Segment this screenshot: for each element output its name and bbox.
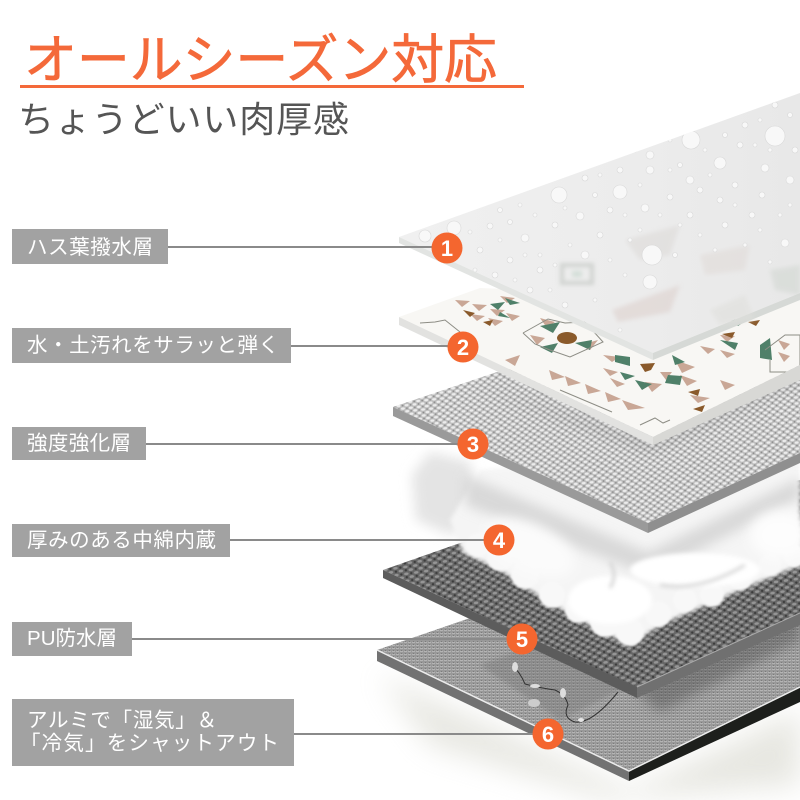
label 2: 水・土汚れをサラッと弾く <box>27 334 279 357</box>
label 3 <box>12 427 461 460</box>
marker 1: 1 <box>441 236 453 261</box>
label 4 <box>12 524 486 557</box>
label 3: 強度強化層 <box>27 432 131 455</box>
aztec motifs <box>420 296 800 425</box>
marker 6: 6 <box>542 722 554 747</box>
label 1 <box>12 229 434 264</box>
marker 2 <box>448 332 478 362</box>
ground shadow <box>380 675 800 800</box>
marker 5: 5 <box>516 627 528 652</box>
layer 4: cotton filling <box>412 440 800 646</box>
subtitle: ちょうどいい肉厚感 <box>18 99 349 140</box>
layer 2: printed pattern sheet <box>399 288 800 445</box>
fluffy lower edge <box>466 533 800 646</box>
marker 2: 2 <box>457 335 469 360</box>
water drops <box>419 102 798 332</box>
water droplets <box>512 662 618 722</box>
label 1: ハス葉撥水層 <box>27 236 153 259</box>
label 4: 厚みのある中綿内蔵 <box>27 529 216 552</box>
layer 3: reinforcement sheet <box>393 300 800 533</box>
layer 1: lotus-leaf water repellent sheet <box>399 93 800 360</box>
label 6: 「冷気」をシャットアウト <box>20 732 279 755</box>
marker 4: 4 <box>493 528 506 553</box>
label 5: PU防水層 <box>27 627 117 650</box>
marker 3: 3 <box>467 432 479 457</box>
layer 6: aluminium base sheet <box>377 560 800 781</box>
marker 6 <box>532 718 564 750</box>
marker 1 <box>432 232 462 264</box>
faded pattern under film <box>562 225 800 325</box>
label 2 <box>12 328 449 363</box>
title: オールシーズン対応 <box>24 31 497 90</box>
marker 5 <box>506 624 538 654</box>
label 6: アルミで「湿気」＆ <box>27 709 217 732</box>
label 5 <box>12 622 508 656</box>
layer 5: PU waterproof sheet <box>383 480 800 698</box>
marker 3 <box>458 428 488 460</box>
label 6 <box>12 699 534 766</box>
marker 4 <box>484 524 514 556</box>
